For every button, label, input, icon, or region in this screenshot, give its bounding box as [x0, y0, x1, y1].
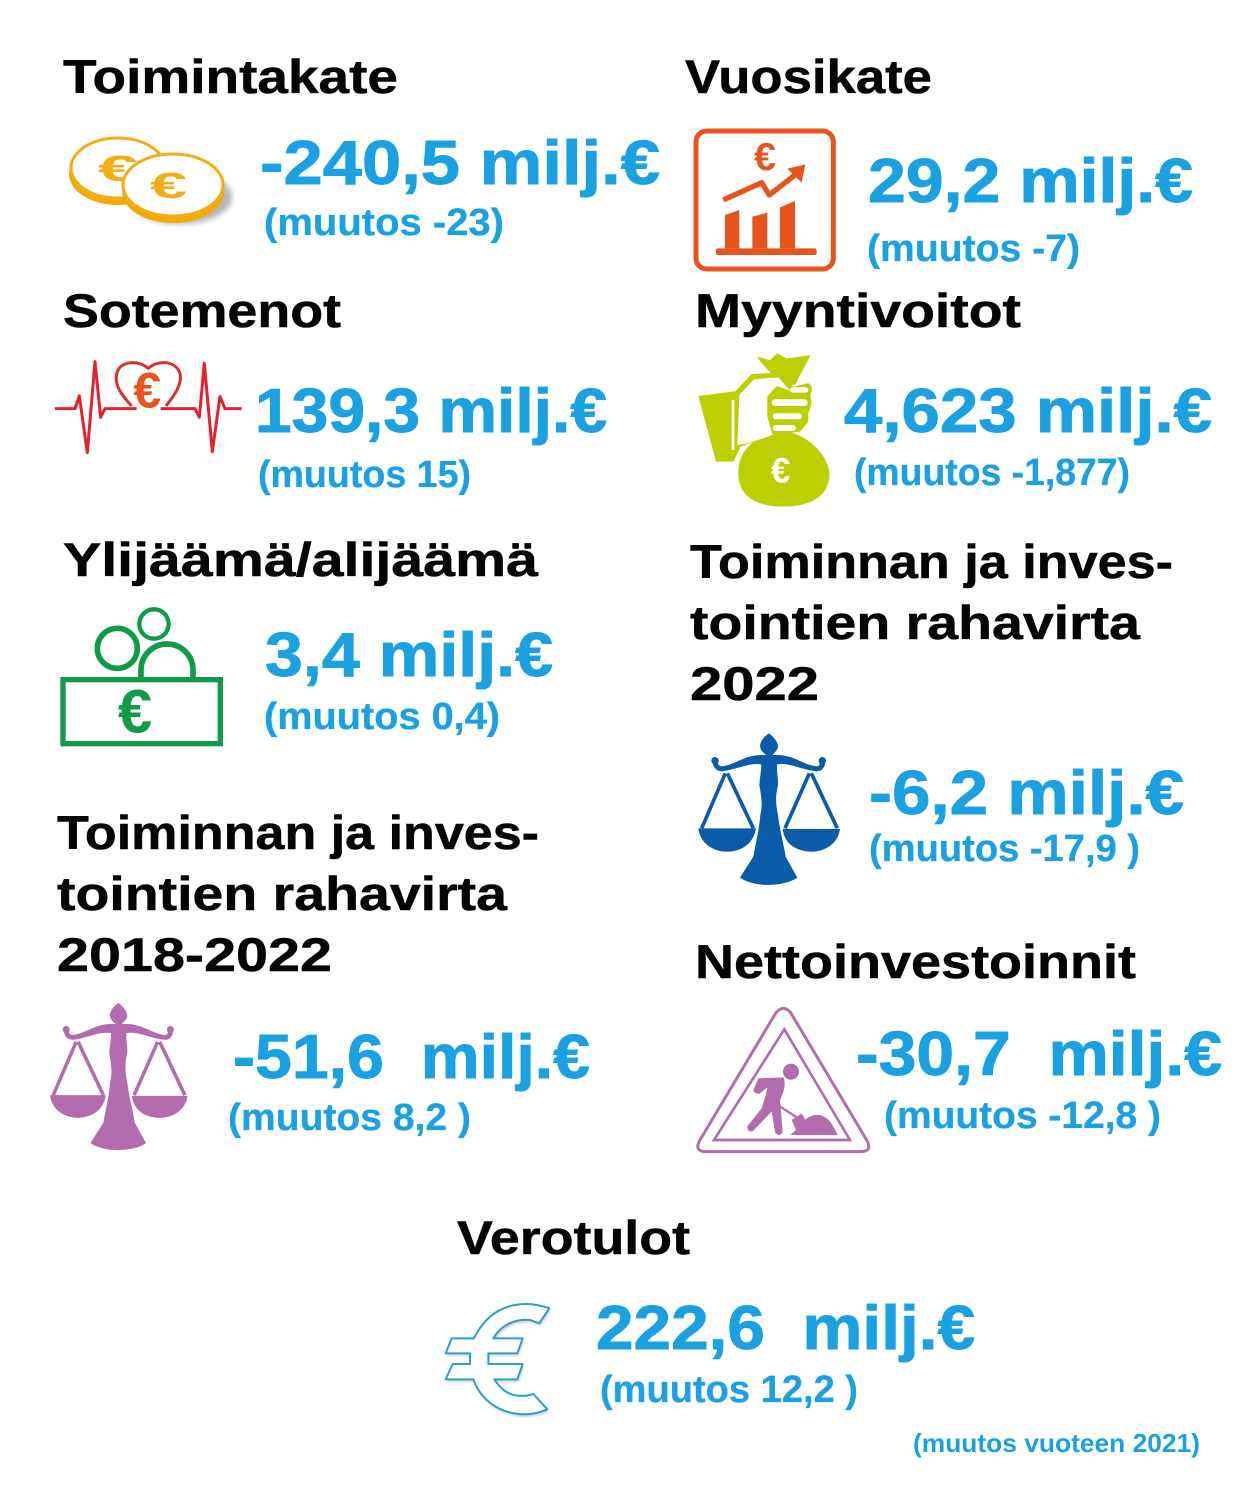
icon: heartbeat with euro	[55, 362, 242, 453]
heading: Toiminnan ja investointien rahavirta 2022: tointien rahavirta	[690, 596, 1141, 649]
value: 139,3 milj.€: 139,3 milj.€	[255, 377, 607, 446]
icon: gold coins: €	[98, 148, 138, 189]
heading: Toiminnan ja investointien rahavirta 2018-2022: Toiminnan ja inves-	[57, 806, 539, 859]
icon: purple balance scale	[50, 1003, 187, 1150]
icon: gold coins	[69, 138, 232, 224]
value: 222,6 milj.€: 222,6 milj.€	[596, 1294, 975, 1363]
heading: Toiminnan ja investointien rahavirta 2018-2022: 2018-2022	[57, 928, 332, 981]
panel: Toiminnan ja investointien rahavirta 2018-2022	[50, 806, 590, 1150]
heading: Toiminnan ja investointien rahavirta 2022	[690, 535, 1173, 710]
change: muutos 15: (muutos 15)	[258, 454, 471, 496]
panel: Ylijäämä/alijäämä	[63, 533, 553, 747]
icon: hand holding money bag	[698, 353, 829, 507]
heading: Nettoinvestoinnit: Nettoinvestoinnit	[695, 935, 1136, 988]
change: muutos 0,4: (muutos 0,4)	[264, 696, 500, 738]
value: 3,4 milj.€: 3,4 milj.€	[265, 621, 553, 690]
panel: Sotemenot	[55, 284, 607, 496]
value: -30,7 milj.€: -30,7 milj.€	[856, 1020, 1222, 1089]
panel: Toiminnan ja investointien rahavirta 2022	[690, 535, 1184, 885]
value: 4,623 milj.€: 4,623 milj.€	[844, 377, 1212, 446]
change: muutos -12,8: (muutos -12,8 )	[884, 1095, 1161, 1137]
heading: Vuosikate: Vuosikate	[685, 50, 932, 103]
icon: rising chart with euro: €	[754, 135, 776, 179]
panel: Nettoinvestoinnit	[695, 935, 1222, 1152]
heading: Toiminnan ja investointien rahavirta 2022: 2022	[690, 657, 819, 710]
heading: Verotulot: Verotulot	[457, 1211, 690, 1264]
heading: Toiminnan ja investointien rahavirta 2022: Toiminnan ja inves-	[690, 535, 1173, 588]
icon: coins over euro box: €	[118, 678, 152, 747]
heading: Myyntivoitot: Myyntivoitot	[695, 284, 1021, 337]
icon: heartbeat with euro: €	[133, 362, 161, 418]
icon: hand holding money bag: €	[771, 452, 790, 491]
panel: Verotulot	[446, 1211, 975, 1417]
value: -6,2 milj.€: -6,2 milj.€	[869, 759, 1184, 828]
heading: Toimintakate: Toimintakate	[63, 50, 398, 103]
heading: Toiminnan ja investointien rahavirta 2018-2022: tointien rahavirta	[57, 867, 508, 920]
heading: Sotemenot: Sotemenot	[63, 284, 341, 337]
panel: Vuosikate	[685, 50, 1193, 270]
icon: outlined euro sign	[446, 1304, 551, 1417]
value: -240,5 milj.€: -240,5 milj.€	[260, 129, 660, 198]
change: muutos -17,9: (muutos -17,9 )	[869, 828, 1140, 870]
icon: road works sign	[698, 1008, 869, 1152]
footnote: change compared with 2021: (muutos vuoteen 2021)	[913, 1428, 1200, 1458]
icon: coins over euro box	[63, 609, 220, 747]
heading: Ylijäämä/alijäämä: Ylijäämä/alijäämä	[63, 533, 539, 586]
panel: Toimintakate	[63, 50, 660, 244]
panel: Myyntivoitot	[695, 284, 1212, 507]
heading: Toiminnan ja investointien rahavirta 2018-2022	[57, 806, 539, 981]
change: muutos -1,877: (muutos -1,877)	[854, 452, 1130, 494]
change: muutos -7: (muutos -7)	[867, 228, 1080, 270]
change: muutos 8,2: (muutos 8,2 )	[228, 1097, 471, 1139]
change: muutos -23: (muutos -23)	[264, 202, 504, 244]
icon: gold coins: €	[150, 165, 187, 206]
value: 29,2 milj.€: 29,2 milj.€	[868, 147, 1193, 216]
icon: blue balance scale	[698, 733, 840, 885]
icon: rising chart with euro	[696, 131, 833, 269]
change: muutos 12,2: (muutos 12,2 )	[600, 1369, 858, 1411]
value: -51,6 milj.€: -51,6 milj.€	[233, 1023, 590, 1092]
